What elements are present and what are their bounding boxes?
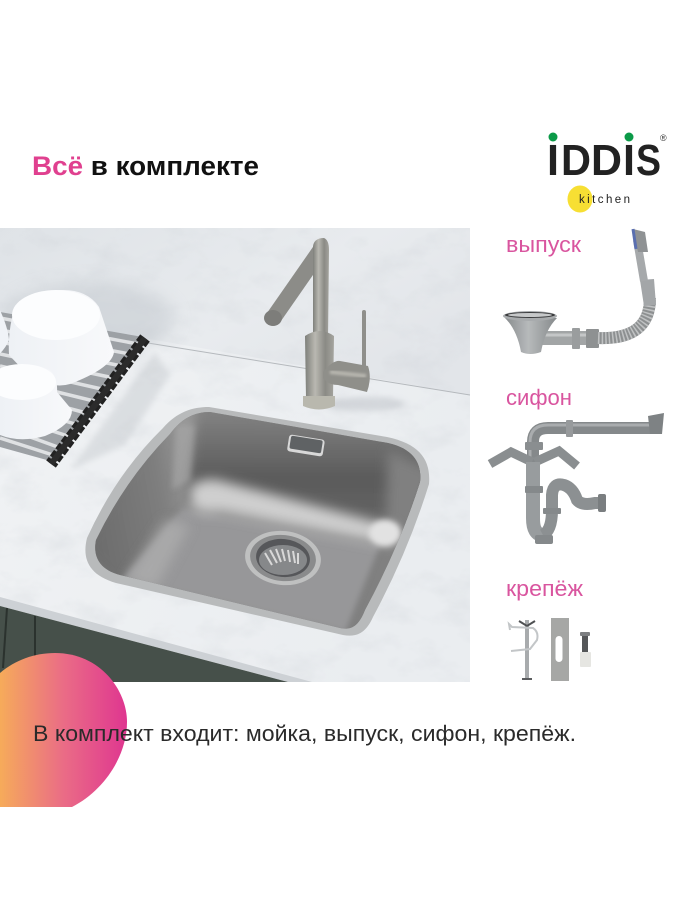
faucet body — [305, 331, 334, 398]
sink floor — [122, 508, 380, 632]
marble texture — [54, 432, 142, 618]
horizontal pipe — [533, 428, 655, 470]
counter front edge — [0, 597, 312, 682]
nuts — [572, 328, 580, 349]
rack rods — [0, 318, 138, 456]
branch arms — [490, 451, 577, 466]
part: mounting hardware — [509, 618, 591, 681]
logo wordmark — [547, 136, 661, 185]
title: Всё в комплекте — [32, 151, 259, 181]
label: сифон: сифон — [506, 385, 572, 410]
logo wordmark: I — [623, 136, 635, 185]
faucet shadow — [325, 397, 405, 411]
reflection band — [190, 479, 395, 545]
clamp — [509, 620, 538, 680]
wall counter joint — [148, 343, 470, 395]
pipe collar — [566, 420, 573, 437]
sink rim — [85, 407, 429, 636]
logo wordmark: D — [591, 136, 622, 185]
faucet lever — [362, 312, 366, 368]
trap bend — [543, 484, 603, 535]
logo wordmark: S — [636, 136, 661, 185]
registered mark: ® — [660, 133, 667, 143]
end cap — [648, 413, 664, 434]
logo wordmark: D — [561, 136, 591, 185]
faucet base — [303, 396, 335, 410]
floor light strip — [126, 518, 186, 584]
lower collars — [543, 508, 561, 514]
bowl partial far left — [0, 310, 9, 354]
logo: IDDIS kitchen — [547, 132, 667, 212]
label: крепёж: крепёж — [506, 576, 583, 601]
small white bowl — [0, 364, 72, 439]
outlet end — [598, 494, 606, 512]
sink drain — [245, 530, 321, 586]
large white bowl — [9, 290, 114, 386]
gradient blob — [0, 653, 127, 807]
cabinet front — [0, 606, 288, 682]
strainer flange — [503, 311, 557, 321]
countertop — [0, 377, 470, 682]
overflow tube — [637, 240, 644, 281]
faucet column — [313, 238, 329, 340]
hose sleeve — [640, 279, 656, 306]
sink interior — [95, 412, 420, 629]
faucet spout — [274, 248, 322, 317]
faucet side handle — [330, 360, 370, 392]
back wall — [182, 412, 420, 532]
part: drain outlet with overflow hose — [503, 229, 656, 354]
left wall — [95, 414, 198, 577]
right wall — [354, 452, 420, 626]
wall — [0, 228, 470, 398]
caption: В комплект входит: мойка, выпуск, сифон, крепёж. — [33, 721, 576, 746]
tee collar — [525, 442, 543, 450]
sink overflow — [287, 434, 325, 457]
rack black edge — [51, 338, 145, 464]
wall shadow behind bowls — [8, 282, 174, 348]
kitchen label: kitchen — [579, 194, 630, 206]
outlet pipe — [540, 331, 598, 345]
rack shadow on counter — [74, 354, 169, 466]
logo green dots — [548, 132, 634, 142]
logo wordmark: I — [547, 136, 559, 185]
spout cap — [264, 310, 282, 326]
cabinet door line — [3, 608, 35, 668]
screw — [582, 632, 588, 652]
corrugated hose — [598, 298, 650, 338]
left wall highlight — [172, 425, 195, 490]
overflow head — [633, 229, 648, 252]
main drop pipe — [533, 462, 543, 535]
steel plate — [551, 618, 569, 681]
dish drying rack — [0, 312, 145, 464]
yellow spot — [568, 186, 592, 212]
part: siphon — [490, 413, 664, 544]
infographic canvas — [0, 132, 666, 807]
label: выпуск: выпуск — [506, 232, 581, 257]
strainer cone — [505, 318, 557, 354]
photo: kitchen sink on marble counter — [0, 228, 470, 682]
faucet — [264, 238, 405, 411]
